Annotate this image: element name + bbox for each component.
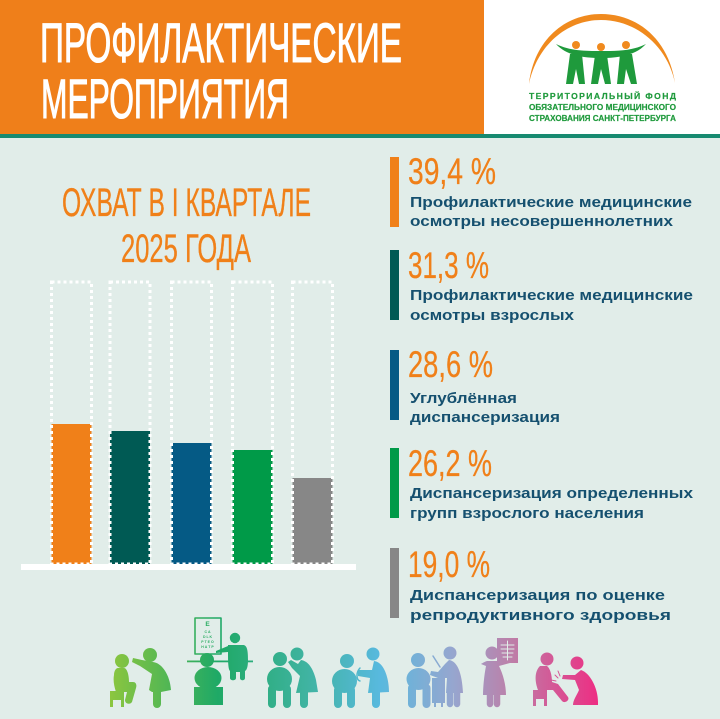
legend item 3: 28,6 % — [408, 344, 493, 385]
icon: eye chart exam — [187, 618, 253, 705]
legend item 3: Углублённая — [410, 390, 517, 407]
logo figures — [556, 44, 646, 84]
legend item 4: 26,2 % — [408, 443, 492, 484]
icon: eye chart exam: Р Т Е О — [201, 640, 214, 644]
icon: throat exam — [267, 648, 318, 704]
bar: 19,0 — [292, 478, 332, 564]
logo arc — [529, 14, 675, 84]
icon: leg exam — [533, 652, 598, 706]
legend item 1 — [390, 151, 692, 230]
bar: 31,3 — [110, 431, 150, 564]
bar: 28,6 — [172, 443, 212, 564]
legend item 4: Диспансеризация определенных — [410, 485, 694, 502]
logo text: ТЕРРИТОРИАЛЬНЫЙ ФОНД — [529, 90, 676, 101]
bar: 26,2 — [232, 450, 272, 564]
bar: 39,4 — [52, 424, 92, 564]
logo text — [529, 90, 676, 123]
icon: eye chart exam: D L K — [203, 635, 213, 639]
legend item 5: 19,0 % — [408, 544, 490, 585]
legend item 5: Диспансеризация по оценке — [410, 587, 665, 604]
logo — [529, 14, 676, 123]
legend item 2: 31,3 % — [408, 245, 489, 286]
legend item 1: Профилактические медицинские — [410, 194, 692, 211]
baseline — [21, 564, 356, 570]
icon: ENT exam — [110, 648, 171, 707]
logo heads — [572, 41, 630, 51]
legend item 4: групп взрослого населения — [410, 505, 644, 522]
title: ПРОФИЛАКТИЧЕСКИЕ — [40, 11, 402, 74]
logo text: СТРАХОВАНИЯ САНКТ-ПЕТЕРБУРГА — [529, 113, 676, 123]
title — [40, 11, 402, 130]
chart heading — [62, 181, 311, 271]
legend item 1: осмотры несовершеннолетних — [410, 213, 674, 230]
legend item 5 — [390, 544, 671, 624]
legend item 3: диспансеризация — [410, 409, 560, 426]
legend item 1: 39,4 % — [408, 151, 496, 192]
icon: x-ray viewing — [481, 638, 518, 704]
title: МЕРОПРИЯТИЯ — [41, 67, 289, 130]
logo text: ОБЯЗАТЕЛЬНОГО МЕДИЦИНСКОГО — [529, 102, 676, 112]
bar outlines — [52, 282, 332, 564]
bar chart — [21, 282, 356, 570]
icon: eye chart exam: Е — [205, 621, 210, 628]
legend item 2: Профилактические медицинские — [410, 287, 693, 304]
legend item 2 — [390, 245, 693, 324]
icon: doctor and cabinet — [406, 646, 463, 707]
icon: blood pressure check — [332, 648, 389, 704]
legend item 2: осмотры взрослых — [410, 307, 575, 324]
legend item 3 — [390, 344, 560, 426]
medical figures row — [110, 618, 598, 707]
icon: eye chart exam: С А — [204, 630, 211, 634]
chart heading: 2025 ГОДА — [121, 227, 251, 271]
icon: eye chart exam: Н А Т Р — [201, 645, 214, 649]
legend item 4 — [390, 443, 694, 522]
chart heading: ОХВАТ В I КВАРТАЛЕ — [62, 181, 311, 225]
legend item 5: репродуктивного здоровья — [410, 607, 671, 624]
header band — [0, 0, 720, 138]
